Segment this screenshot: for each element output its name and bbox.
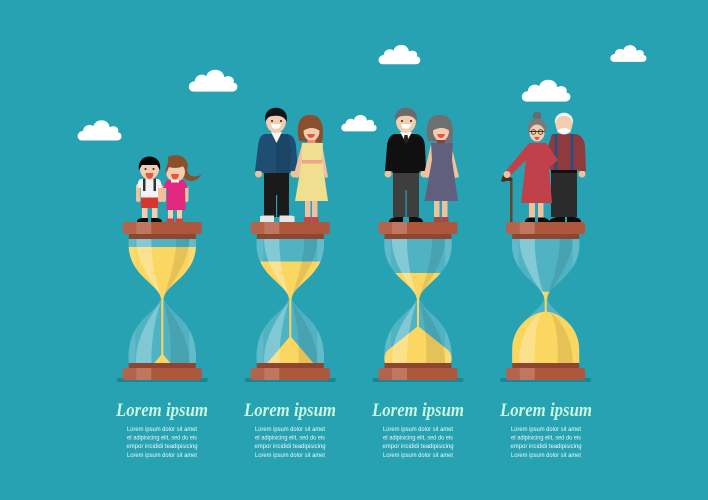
girl: [162, 155, 202, 222]
base: [117, 363, 208, 382]
caption 4: [499, 400, 592, 459]
hourglass 2: young adult: [245, 222, 336, 382]
caption 2 text: et adipisicing elit, sed do eis: [255, 434, 325, 442]
children couple: [136, 155, 202, 222]
cloud 4: [379, 45, 420, 64]
caption 4 text: [510, 426, 582, 459]
top cap: [123, 222, 202, 239]
glass highlights: [122, 239, 202, 363]
caption 3: [371, 400, 464, 459]
sand: [541, 292, 550, 312]
sand: [384, 273, 452, 363]
base: [372, 363, 464, 382]
cloud 6: [610, 45, 646, 62]
caption 1 text: et adipisicing elit, sed do eis: [127, 434, 197, 442]
caption 2: [243, 400, 336, 459]
glass body: [129, 239, 196, 363]
cloud 3: [341, 115, 377, 131]
caption 1 text: Lorem ipsum dolor sit amet: [127, 452, 197, 459]
caption 4 text: Lorem ipsum dolor sit amet: [511, 426, 581, 433]
cloud 1: [78, 120, 122, 141]
caption 4 text: Lorem ipsum dolor sit amet: [511, 452, 581, 459]
caption 2 text: [254, 426, 326, 459]
glass highlights: [250, 239, 330, 363]
caption 3 text: empor incididi teadipisicing: [382, 443, 454, 450]
glass body: [512, 239, 579, 363]
elderly couple: [501, 112, 586, 222]
hourglass 4: old age: [500, 222, 591, 382]
glass highlights: [378, 239, 458, 363]
sand: [260, 262, 320, 363]
caption 4 heading: Lorem ipsum: [499, 400, 592, 421]
sand dome: [512, 312, 579, 363]
hourglass 3: middle age: [372, 222, 464, 382]
caption 1 text: [126, 426, 198, 459]
caption 3 heading: Lorem ipsum: [371, 400, 464, 421]
caption 1: [115, 400, 208, 459]
glass highlights: [512, 239, 580, 296]
man in navy jacket: [255, 108, 298, 222]
cloud 5: [522, 80, 570, 102]
base: [500, 363, 591, 382]
caption 3 text: et adipisicing elit, sed do eis: [383, 434, 453, 442]
caption 4 text: empor incididi teadipisicing: [510, 443, 582, 450]
caption 2 text: empor incididi teadipisicing: [254, 443, 326, 450]
base: [245, 363, 336, 382]
caption 3 text: Lorem ipsum dolor sit amet: [383, 452, 453, 459]
glass body: [257, 239, 324, 363]
caption 3 text: Lorem ipsum dolor sit amet: [383, 426, 453, 433]
caption 1 text: empor incididi teadipisicing: [126, 443, 198, 450]
top cap: [506, 222, 585, 239]
woman in grey dress: [424, 115, 459, 222]
middle-aged couple: [384, 108, 459, 222]
caption 2 text: Lorem ipsum dolor sit amet: [255, 426, 325, 433]
caption 2 text: Lorem ipsum dolor sit amet: [255, 452, 325, 459]
man in black suit: [384, 108, 428, 222]
hourglass 1: childhood: [117, 222, 208, 382]
caption 1 heading: Lorem ipsum: [115, 400, 208, 421]
top cap: [378, 222, 458, 239]
dome highlights: [519, 312, 573, 363]
woman in yellow dress: [294, 115, 328, 222]
caption 4 text: et adipisicing elit, sed do eis: [511, 434, 581, 442]
caption 2 heading: Lorem ipsum: [243, 400, 336, 421]
glass body: [384, 239, 452, 363]
caption 1 text: Lorem ipsum dolor sit amet: [127, 426, 197, 433]
adult couple: [255, 108, 328, 222]
cloud 2: [189, 70, 237, 92]
sand: [128, 247, 196, 363]
top cap: [251, 222, 330, 239]
caption 3 text: [382, 426, 454, 459]
grandmother: [501, 112, 558, 222]
boy: [136, 156, 162, 222]
grandfather: [547, 113, 586, 222]
